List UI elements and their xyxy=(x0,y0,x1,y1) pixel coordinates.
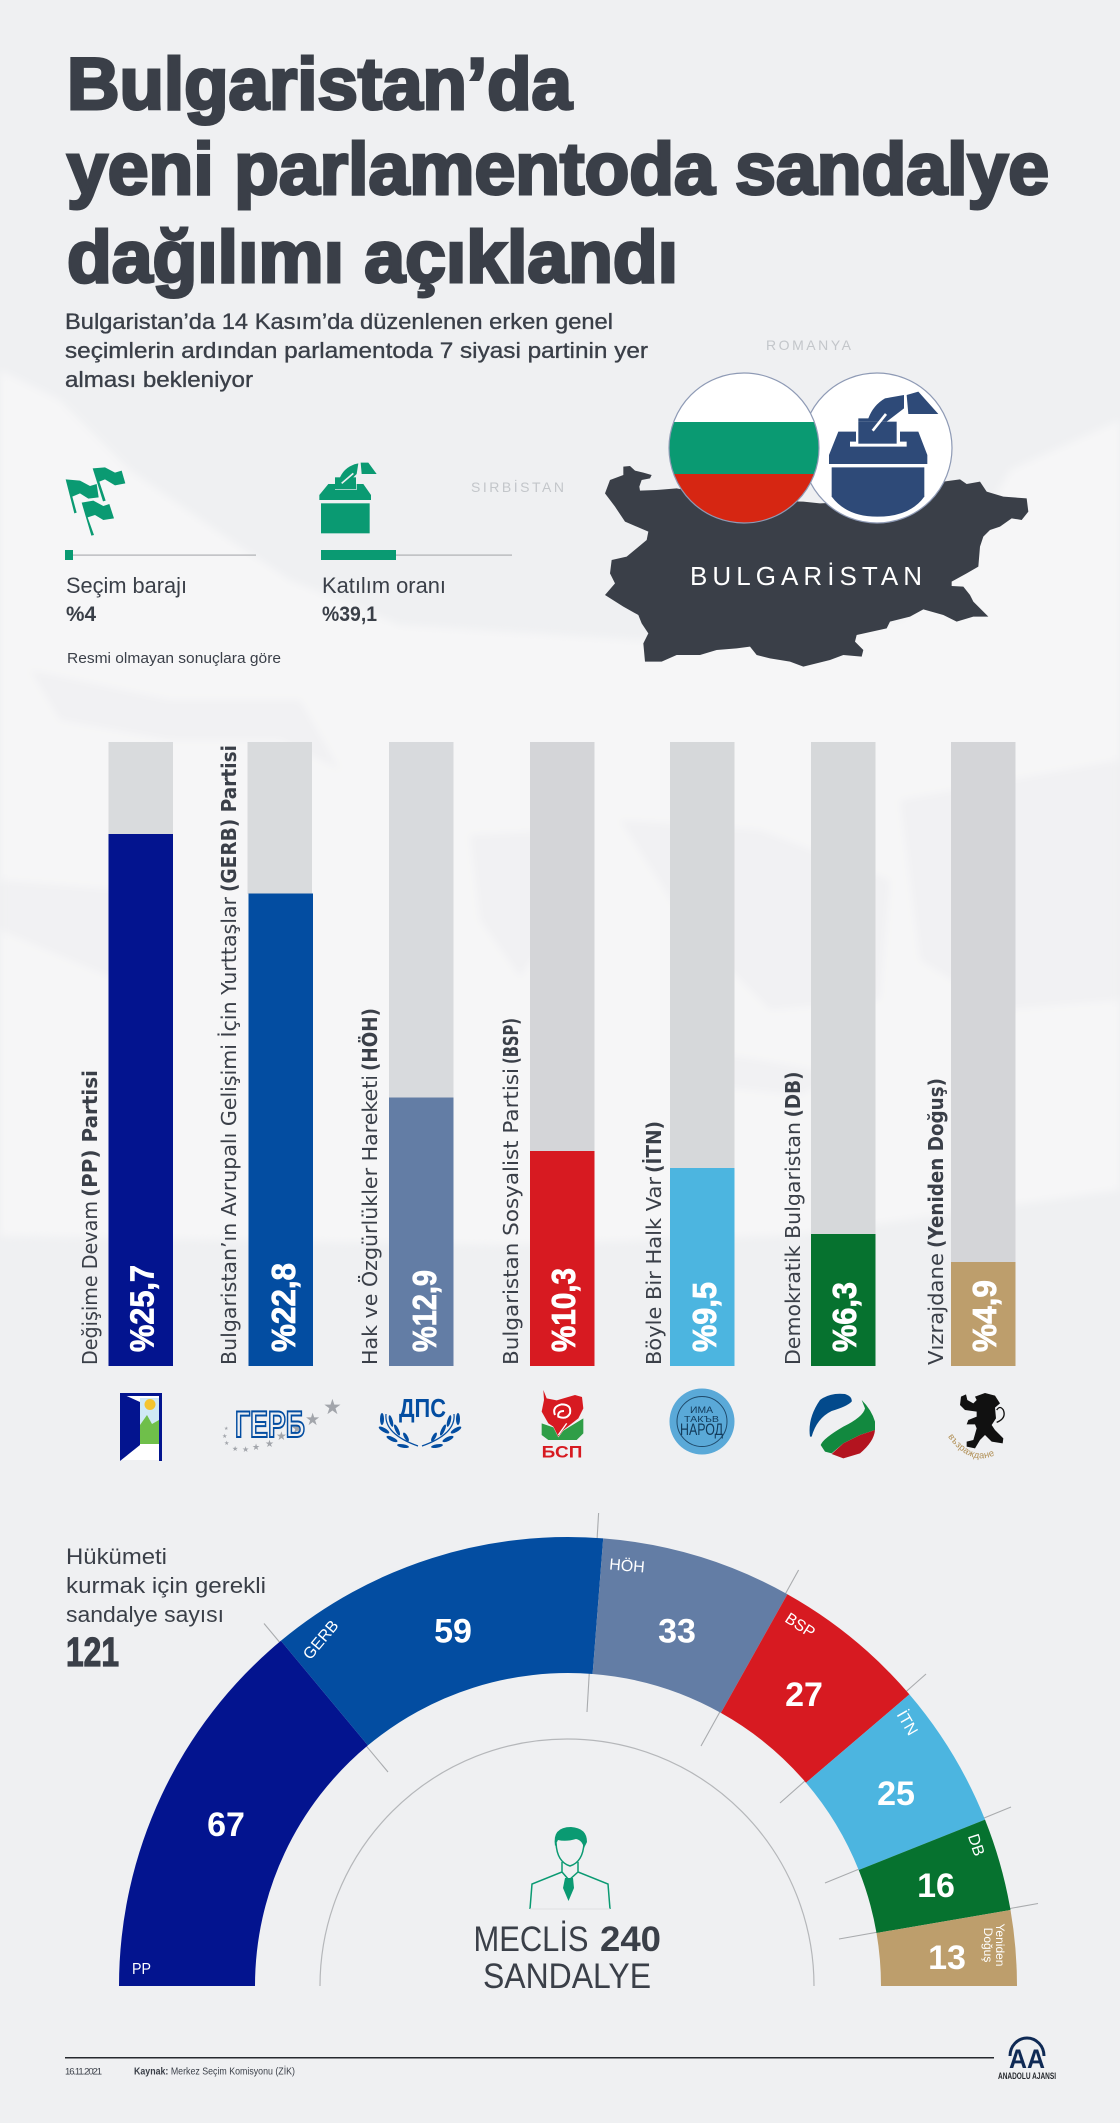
bar: İTN: (İTN) xyxy=(642,1121,666,1173)
segment: Yeniden Doğuş: Doğuş xyxy=(981,1928,995,1962)
bar: Yeniden Doğuş: (Yeniden Doğuş) xyxy=(924,1078,948,1248)
logo: GERB: ★ xyxy=(224,1440,229,1447)
logo: ITN: ТАКЪВ xyxy=(684,1414,719,1424)
stat: election threshold xyxy=(65,467,256,626)
map: Bulgaria xyxy=(605,466,1028,667)
segment: DB xyxy=(859,1820,1010,1933)
logo: GERB: ★ xyxy=(232,1445,238,1453)
segment: PP: 67 xyxy=(207,1806,245,1844)
segment: GERB xyxy=(281,1537,603,1745)
text: parliament 240 seats: 240 xyxy=(600,1920,661,1959)
logo: DB xyxy=(810,1394,875,1458)
logo: GERB: ★ xyxy=(323,1395,342,1419)
text: seats needed for government: Hükümeti xyxy=(66,1544,167,1569)
logo: Anadolu Ajansı: AA xyxy=(1009,2044,1045,2074)
segment: Yeniden Doğuş: Yeniden xyxy=(993,1924,1007,1966)
stat: turnout: Katılım oranı xyxy=(322,573,446,598)
segment: PP xyxy=(119,1641,368,1986)
inner arc xyxy=(320,1739,814,1986)
logo: GERB: ★ xyxy=(265,1439,274,1450)
bar: HÖH: %12,9 xyxy=(406,1270,443,1352)
title: dağılımı açıklandı xyxy=(67,217,678,298)
bar: BSP xyxy=(499,742,594,1366)
bar: İTN: %9,5 xyxy=(686,1282,723,1352)
segment: Yeniden Doğuş xyxy=(876,1910,1017,1986)
text: parliament 240 seats: SANDALYE xyxy=(483,1957,651,1996)
stat: election threshold: Seçim barajı xyxy=(66,573,187,598)
bar: İTN: Böyle Bir Halk Var xyxy=(642,1176,666,1365)
bar: Yeniden Doğuş: Vızrajdane xyxy=(924,1253,948,1365)
map label: Serbia: SIRBİSTAN xyxy=(471,478,564,495)
bar: PP: %25,7 xyxy=(124,1265,160,1352)
bar: GERB: Bulgaristan’ın Avrupalı Gelişimi İçin Yurttaşlar xyxy=(217,896,241,1365)
text: parliament 240 seats: MECLİS xyxy=(474,1920,588,1959)
icon: ballot circle xyxy=(802,373,952,523)
logo: ITN: ИМА xyxy=(690,1405,713,1415)
subtitle text: Bulgaristan’da 14 Kasım’da düzenlenen erken genel xyxy=(65,309,613,334)
icon: Bulgarian flag circle xyxy=(669,373,819,524)
logo: Vazrazhdane: възраждане xyxy=(948,1434,994,1460)
bar: GERB: (GERB) Partisi xyxy=(217,745,241,892)
logo: GERB xyxy=(222,1395,342,1454)
bar: BSP: (BSP) xyxy=(499,1018,523,1064)
icon: flags xyxy=(66,467,125,536)
bar: PP: Değişime Devam xyxy=(78,1201,102,1365)
subtitle text: alması bekleniyor xyxy=(65,367,253,392)
title: yeni parlamentoda sandalye xyxy=(67,129,1049,210)
segment: DB: 16 xyxy=(917,1867,955,1905)
logo: GERB: ★ xyxy=(305,1410,320,1430)
subtitle text: seçimlerin ardından parlamentoda 7 siyasi partinin yer xyxy=(65,338,648,363)
logo: BSP: БСП xyxy=(542,1443,582,1462)
logo: Vazrazhdane xyxy=(948,1393,1005,1460)
segment: İTN: İTN xyxy=(893,1707,922,1739)
chart: parliament hemicycle xyxy=(119,1513,1038,1986)
logo: DPS: ДПС xyxy=(399,1393,446,1423)
stat: turnout xyxy=(319,463,512,626)
logo: GERB: ГЕРБ xyxy=(235,1404,305,1445)
text: seats needed for government: kurmak için gerekli xyxy=(66,1573,266,1598)
text: seats needed for government: 121 xyxy=(66,1629,119,1675)
segment: GERB: 59 xyxy=(434,1612,472,1650)
logo: DPS xyxy=(378,1393,462,1449)
logo: BSP xyxy=(542,1390,583,1462)
title: Bulgaristan’da xyxy=(67,44,573,125)
bar: GERB: %22,8 xyxy=(265,1263,302,1352)
map label: Romania: ROMANYA xyxy=(766,337,852,353)
bar: DB xyxy=(781,742,876,1366)
text: seats needed for government: sandalye sayısı xyxy=(66,1602,224,1627)
logo: GERB: ★ xyxy=(222,1433,227,1440)
bar: HÖH: Hak ve Özgürlükler Hareketi xyxy=(358,1075,382,1365)
footer: 16.11.2021 xyxy=(65,2066,102,2078)
logo: ITN xyxy=(670,1388,734,1454)
logo: GERB: ★ xyxy=(242,1445,249,1454)
segment: Yeniden Doğuş: 13 xyxy=(928,1939,966,1977)
text: parliament 240 seats xyxy=(474,1920,661,1996)
segment: DB: DB xyxy=(964,1832,987,1858)
segment: HÖH: 33 xyxy=(658,1612,696,1650)
bar: DB: %6,3 xyxy=(826,1282,863,1352)
bar: İTN xyxy=(642,742,734,1366)
logo: GERB: ★ xyxy=(276,1429,287,1443)
title xyxy=(67,44,1049,298)
icon: ballot box xyxy=(319,463,377,533)
bar: Yeniden Doğuş xyxy=(924,742,1016,1366)
stat: turnout: %39,1 xyxy=(322,603,377,626)
bar: HÖH: (HÖH) xyxy=(358,1008,382,1071)
logo: GERB: ★ xyxy=(291,1421,304,1437)
bar: Yeniden Doğuş: %4,9 xyxy=(966,1280,1003,1352)
bar: BSP: %10,3 xyxy=(545,1268,582,1352)
icon: parliament member xyxy=(530,1827,610,1910)
segment: HÖH xyxy=(593,1538,787,1713)
bar: PP xyxy=(78,742,173,1366)
logo: PP xyxy=(120,1393,162,1461)
bar: DB: Demokratik Bulgaristan xyxy=(781,1122,805,1365)
segment: BSP: BSP xyxy=(782,1610,818,1642)
footer: Kaynak: Merkez Seçim Komisyonu (ZİK) xyxy=(134,2064,295,2078)
segment: BSP: 27 xyxy=(785,1676,823,1714)
segment: İTN: 25 xyxy=(877,1775,915,1813)
logo: GERB: ★ xyxy=(224,1426,229,1432)
subtitle text xyxy=(65,309,648,392)
segment: HÖH: HÖH xyxy=(609,1555,645,1577)
bar: PP: (PP) Partisi xyxy=(78,1070,102,1197)
bar: HÖH xyxy=(358,742,454,1366)
logo: ITN: НАРОД xyxy=(680,1420,723,1439)
footer xyxy=(65,2057,994,2078)
bar: GERB xyxy=(217,742,313,1366)
segment: BSP xyxy=(721,1594,909,1783)
map: Bulgaria: BULGARİSTAN xyxy=(690,561,922,591)
segment: İTN xyxy=(806,1694,985,1870)
segment: PP: PP xyxy=(132,1961,151,1978)
text: seats needed for government xyxy=(66,1544,266,1675)
stat: election threshold: %4 xyxy=(66,603,96,626)
logo: GERB: ★ xyxy=(252,1443,260,1453)
bar: DB: (DB) xyxy=(781,1072,805,1118)
logo: Anadolu Ajansı xyxy=(998,2038,1056,2081)
note: unofficial results: Resmi olmayan sonuçlara göre xyxy=(67,650,281,667)
segment: GERB: GERB xyxy=(300,1617,342,1663)
logo: Anadolu Ajansı: ANADOLU AJANSI xyxy=(998,2071,1056,2081)
bar chart: vote shares xyxy=(78,742,1016,1366)
bar: BSP: Bulgaristan Sosyalist Partisi xyxy=(499,1068,523,1365)
